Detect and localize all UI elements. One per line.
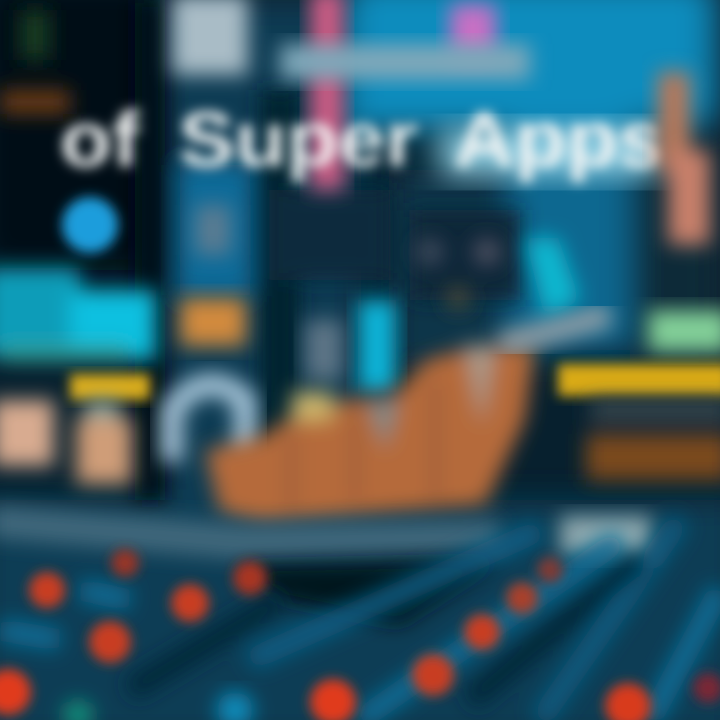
icon: grey figure — [305, 320, 343, 380]
icon: cart handle — [500, 315, 610, 345]
shadow under the shelf — [240, 560, 500, 625]
icon: red dots — [0, 549, 720, 720]
panel: peach blocks — [0, 400, 132, 484]
panel: yellow band right — [558, 364, 720, 396]
panel: right orange strip — [658, 72, 710, 245]
icon: small tile glow — [0, 10, 501, 310]
panel: brown band right — [586, 400, 720, 480]
icon: magenta tile — [450, 4, 496, 60]
panel: top grey block — [172, 0, 248, 75]
panel: cyan block left — [0, 268, 156, 361]
icon: cyan vertical bar — [358, 300, 396, 392]
title: of Super Apps — [60, 95, 665, 183]
icon: orange tile — [180, 298, 246, 346]
chart: shopping cart basket — [205, 345, 535, 522]
icon: blue circle — [62, 197, 118, 253]
panel: pink vertical strip — [310, 0, 344, 190]
heading: top line — [280, 44, 530, 80]
icon: cyan right tile — [525, 238, 580, 318]
panel: green label right — [648, 310, 720, 352]
panel: light grey block — [560, 516, 652, 556]
icon: white arc — [172, 385, 245, 462]
panel: shelf band — [0, 505, 500, 560]
panel: diagonal floor stripes — [0, 520, 720, 720]
panel: yellow label left — [70, 374, 150, 400]
icon: small floor lights — [64, 692, 253, 720]
heading backdrop: light sky panel — [440, 128, 660, 176]
panel: dark columns — [135, 0, 520, 500]
